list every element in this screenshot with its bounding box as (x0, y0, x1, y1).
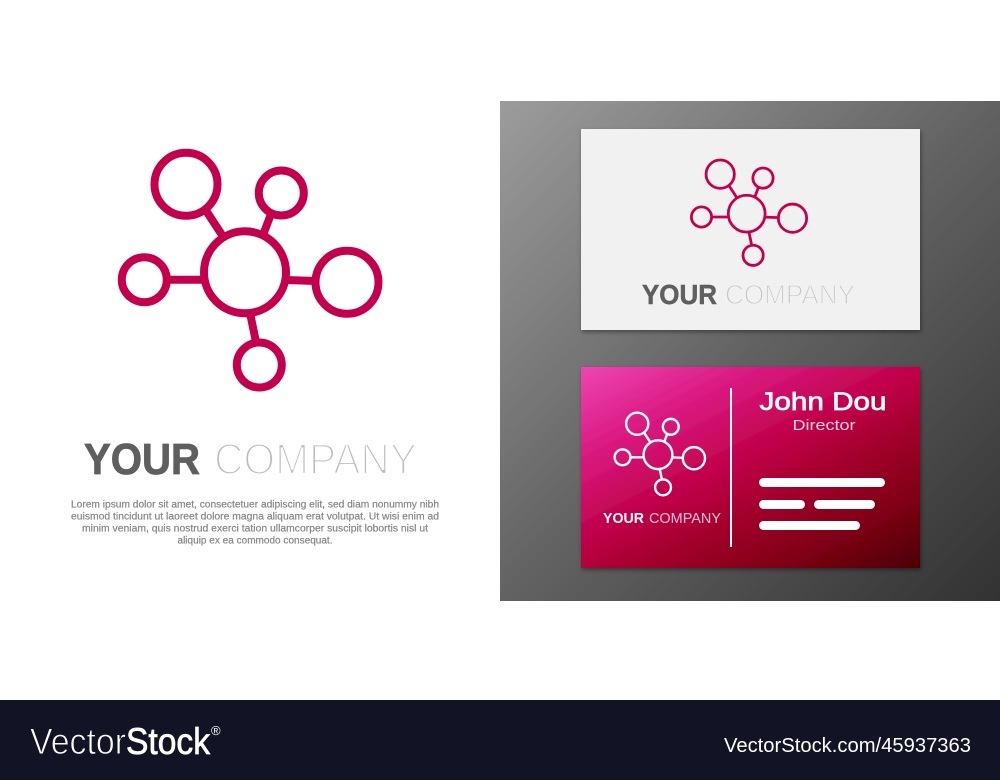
footer bar (0, 700, 1000, 780)
vertical divider (730, 388, 732, 547)
card wordmark: YOUR (603, 511, 645, 527)
logo wordmark: COMPANY (214, 435, 417, 484)
job title: Director (792, 417, 856, 434)
card wordmark: COMPANY (725, 279, 855, 310)
footer logo: ® (211, 723, 221, 738)
business card: light front (581, 129, 920, 330)
footer logo: Vector (30, 721, 126, 762)
name: John Dou (760, 388, 886, 416)
panel: main logo (71, 153, 439, 547)
card wordmark: COMPANY (649, 511, 721, 527)
placeholder text bars (759, 478, 885, 530)
card wordmark: YOUR (642, 279, 717, 310)
description text: aliquip ex ea commodo consequat. (178, 536, 332, 546)
footer image id: VectorStock.com/45937363 (724, 735, 971, 757)
description text (71, 500, 439, 546)
description text: Lorem ipsum dolor sit amet, consectetuer adipiscing elit, sed diam nonummy nibh (71, 500, 439, 510)
footer logo (30, 721, 221, 762)
card wordmark (603, 511, 721, 527)
icon: network molecule (615, 413, 705, 495)
description text: euismod tincidunt ut laoreet dolore magna aliquam erat volutpat. Ut wisi enim ad (71, 512, 439, 522)
icon: network molecule (691, 160, 807, 265)
footer logo: Stock (126, 721, 210, 762)
icon: network molecule (122, 153, 379, 388)
logo wordmark: YOUR (84, 435, 200, 484)
panel: gray mockup background (500, 101, 1000, 601)
logo wordmark (84, 435, 417, 484)
card wordmark (642, 279, 855, 310)
description text: minim veniam, quis nostrud exerci tation ullamcorper suscipit lobortis nisl ut (82, 524, 428, 534)
business card: magenta back (581, 367, 920, 568)
